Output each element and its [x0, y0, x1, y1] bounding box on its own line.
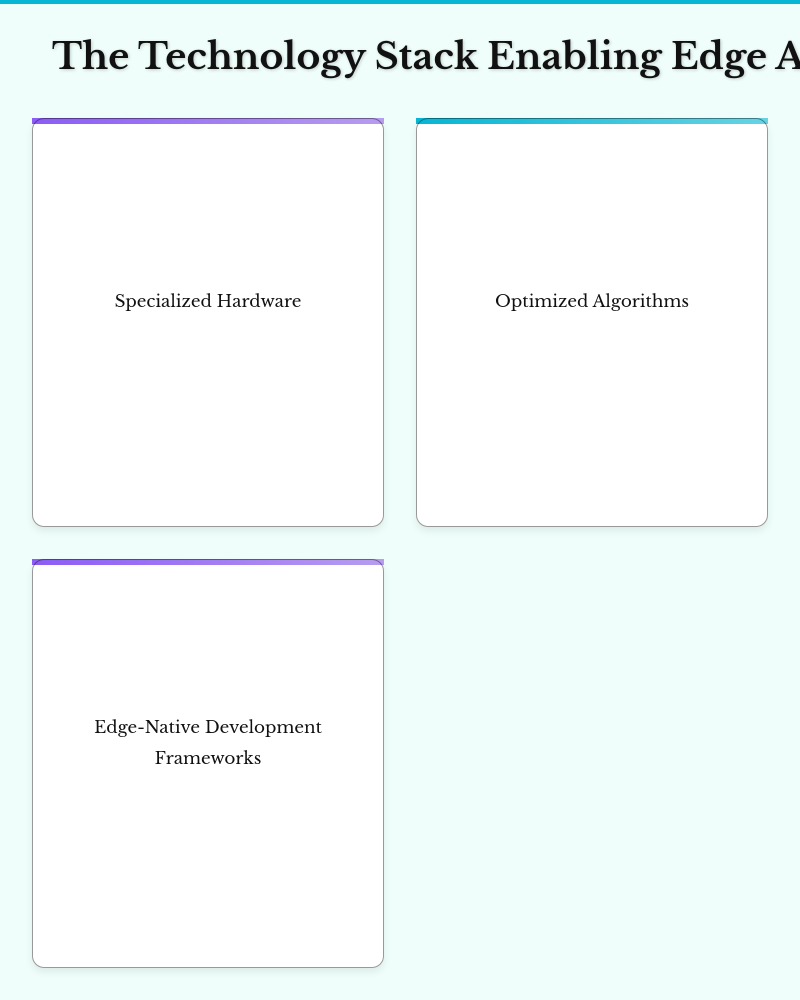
panel: specialized hardware: [32, 118, 384, 527]
panel label: specialized hardware: Specialized Hardware: [115, 291, 301, 312]
panel border: [416, 118, 768, 527]
panel accent bar: violet: [32, 559, 384, 565]
top accent bar: [0, 0, 800, 4]
panel label: optimized algorithms: Optimized Algorithms: [495, 291, 689, 312]
panel: optimized algorithms: [416, 118, 768, 527]
panel border: [32, 118, 384, 527]
panel accent bar: violet: [32, 118, 384, 124]
panel border: [32, 559, 384, 968]
title: The Technology Stack Enabling Edge AI: [52, 34, 800, 79]
panel: edge-native development frameworks: [32, 559, 384, 968]
panel accent bar: cyan: [416, 118, 768, 124]
panel label: edge-native development frameworks: Edge-Native Development Frameworks: [94, 717, 322, 768]
